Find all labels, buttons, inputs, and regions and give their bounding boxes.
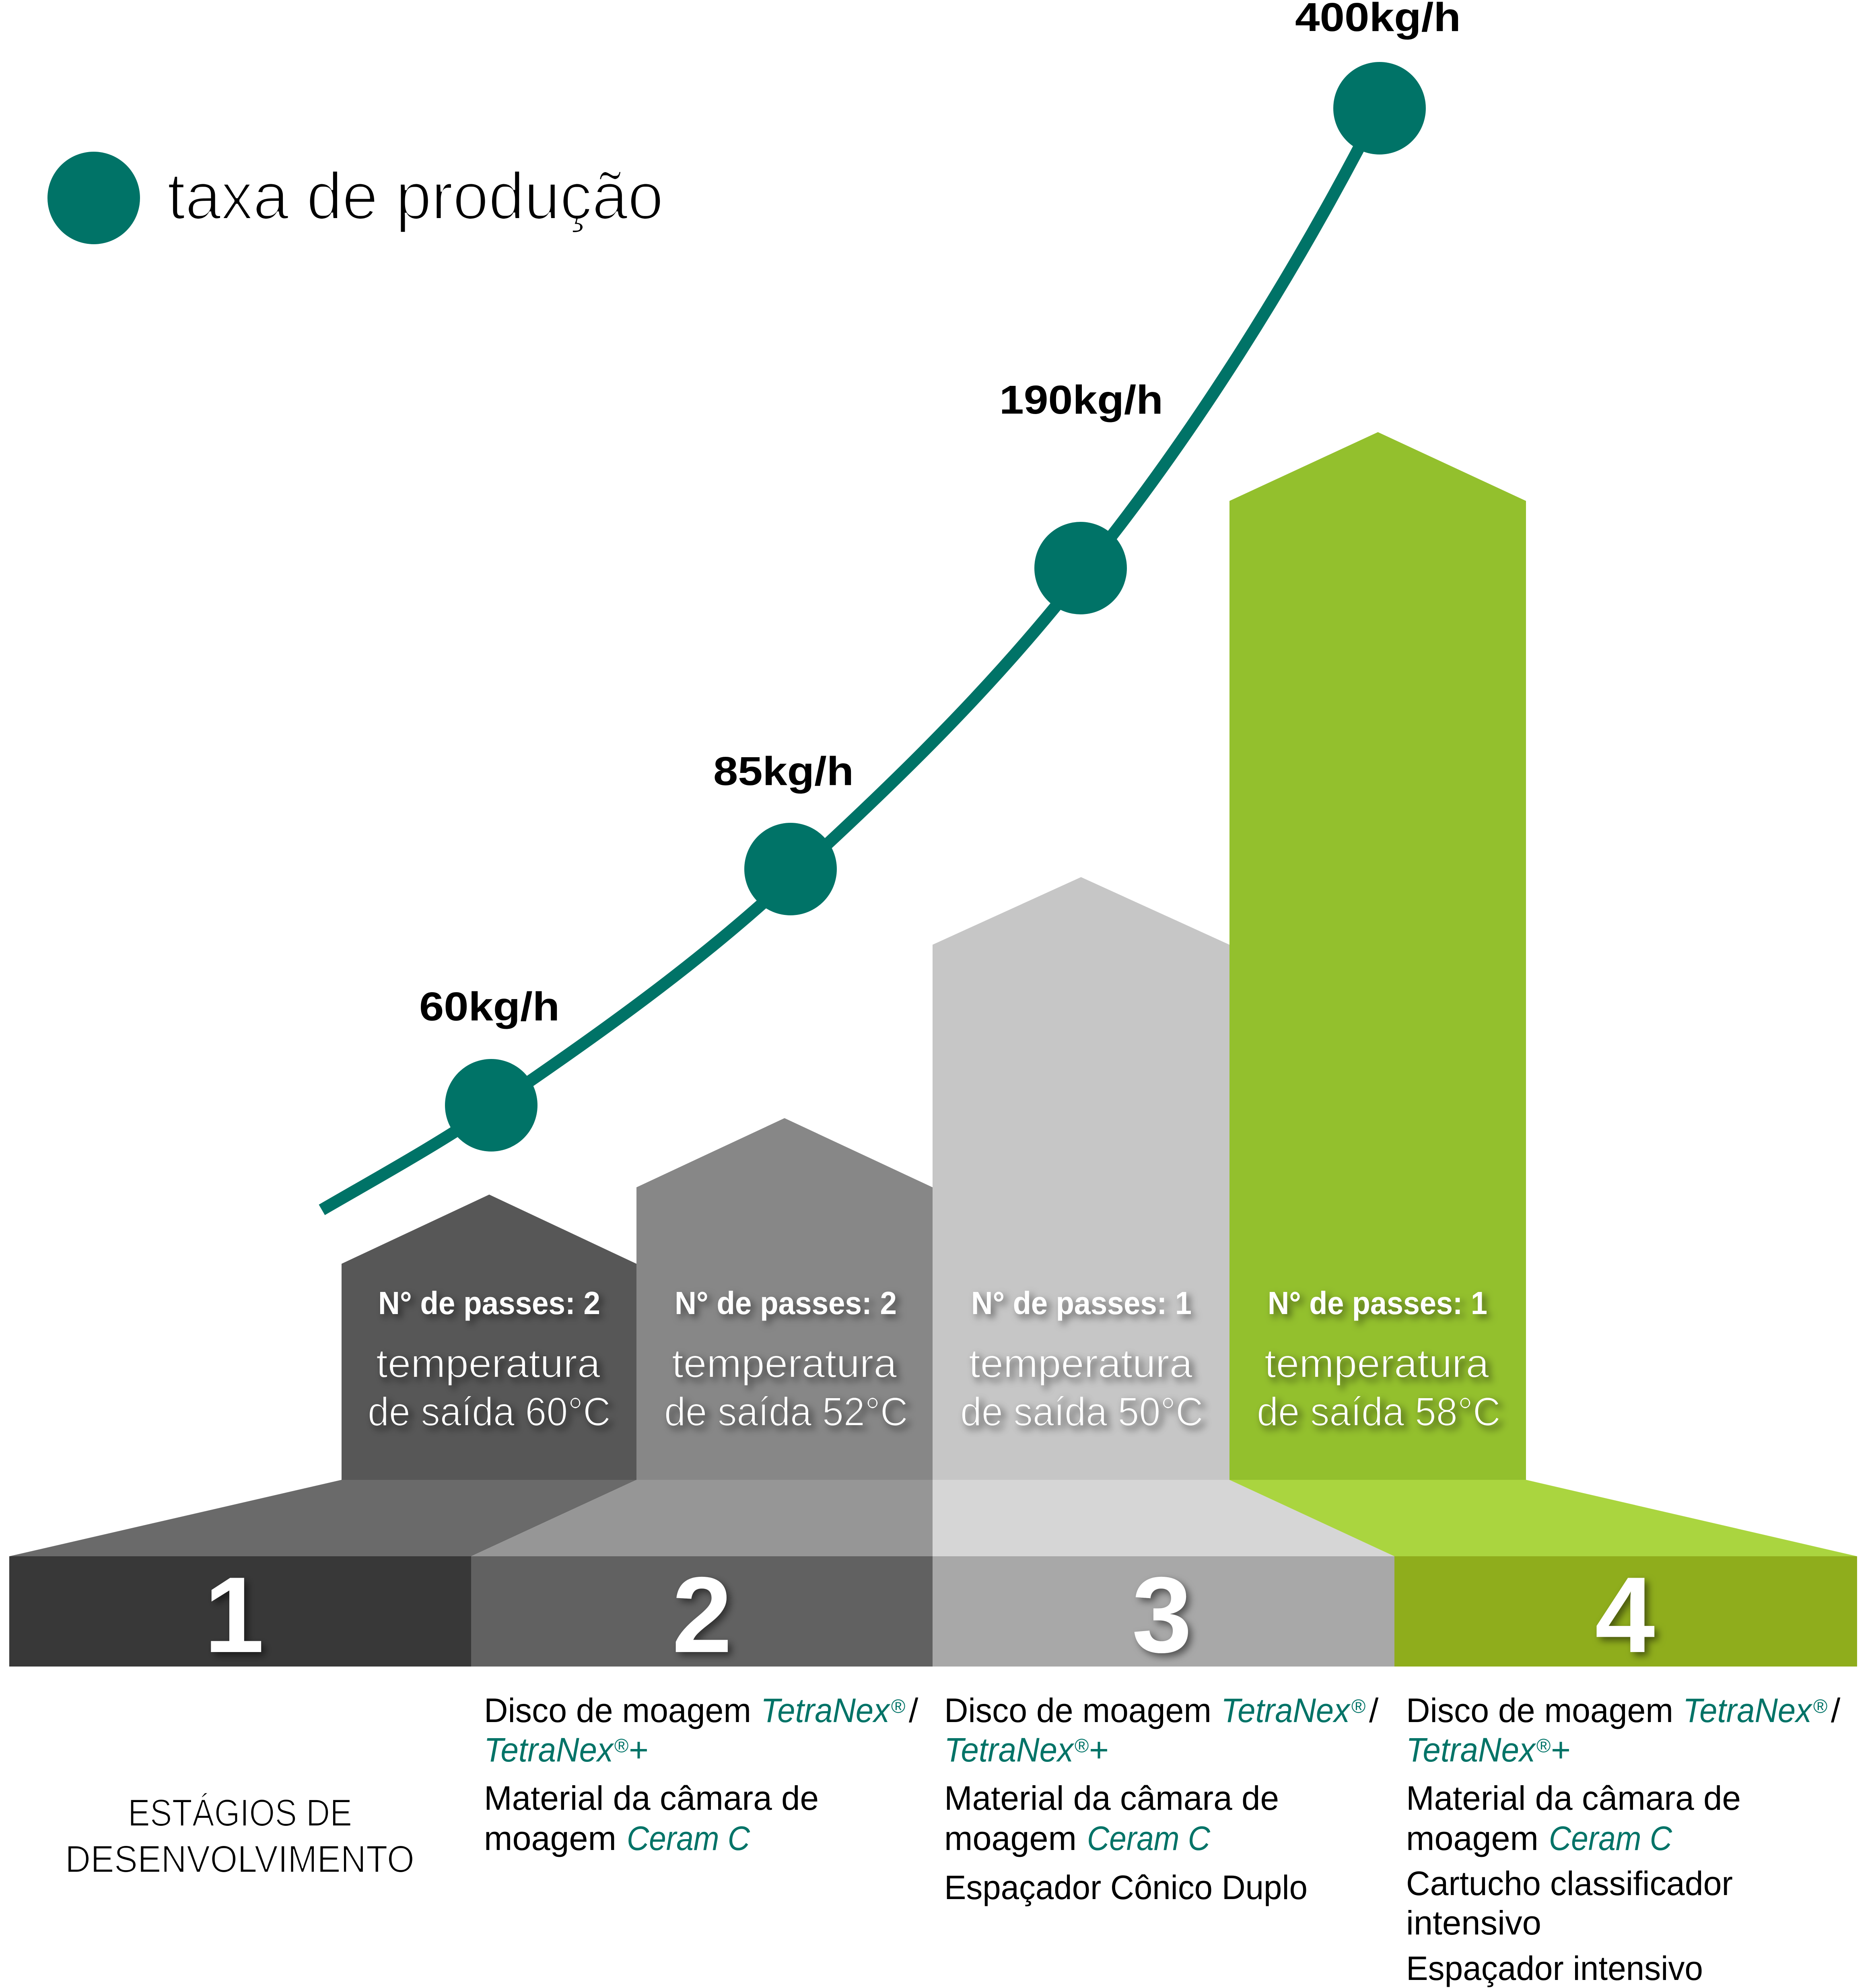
bar 2 text: N° de passes: 2 (675, 1285, 897, 1321)
data point 85kg/h (713, 749, 854, 915)
data point 60kg/h: 60kg/h (419, 984, 560, 1029)
production curve (322, 108, 1380, 1210)
bar 1 text (368, 1285, 611, 1434)
stage 2 specs: Material da câmara de (484, 1779, 819, 1817)
data point 85kg/h: 85kg/h (713, 749, 854, 794)
stage 3 specs: Disco de moagem (944, 1691, 1211, 1729)
bar 3 (933, 877, 1229, 1480)
stage 4 specs: intensivo (1406, 1904, 1541, 1942)
stage 3 specs (944, 1691, 1379, 1906)
stage 2 specs (484, 1691, 918, 1857)
stage numbers: 4 (1595, 1554, 1656, 1675)
stage 4 specs: Ceram C (1549, 1819, 1672, 1857)
bar 4 text: temperatura (1264, 1341, 1489, 1386)
stage block 1 (9, 1556, 471, 1667)
stage 4 specs: Cartucho classificador (1406, 1864, 1733, 1902)
bar 2 (636, 1118, 933, 1480)
stage 3 specs: ® (1075, 1735, 1089, 1757)
bar 4 text (1257, 1285, 1501, 1434)
legend dot (47, 152, 140, 244)
stages heading (65, 1792, 414, 1881)
stage 4 specs: Espaçador intensivo (1406, 1949, 1703, 1987)
stage 4 specs: + (1551, 1731, 1571, 1769)
stage 2 specs: / (909, 1691, 918, 1729)
stage 4 specs: / (1831, 1691, 1841, 1729)
stage 4 specs: TetraNex (1683, 1691, 1813, 1729)
stage 3 specs: TetraNex (1221, 1691, 1351, 1729)
stage numbers (204, 1554, 1656, 1675)
stage 3 specs: Ceram C (1087, 1819, 1211, 1857)
bar 4 (1229, 432, 1526, 1480)
stage 2 specs: TetraNex (484, 1731, 614, 1769)
stage 2 specs: ® (614, 1735, 628, 1757)
bar 4 text: N° de passes: 1 (1268, 1285, 1487, 1321)
stage 4 specs: moagem (1406, 1819, 1538, 1857)
stage 3 specs: moagem (944, 1819, 1077, 1857)
bar 2 text: temperatura (672, 1341, 897, 1386)
bar 3 text: de saída 50°C (960, 1389, 1203, 1434)
bar 2 text: de saída 52°C (664, 1389, 908, 1434)
base top 3 (933, 1480, 1394, 1556)
bar 1 text: temperatura (376, 1341, 600, 1386)
base top 2 (471, 1480, 933, 1556)
base top 1 (9, 1480, 636, 1556)
bar 1 text: de saída 60°C (368, 1389, 611, 1434)
stage 4 specs: ® (1536, 1735, 1551, 1757)
data point 190kg/h: 190kg/h (999, 377, 1163, 422)
legend: taxa de produção (47, 152, 663, 244)
stage block 2 (471, 1556, 933, 1667)
stage 2 specs: TetraNex (761, 1691, 891, 1729)
stage 2 specs: moagem (484, 1819, 616, 1857)
stage 4 specs: TetraNex (1406, 1731, 1536, 1769)
stage 2 specs: Ceram C (627, 1819, 750, 1857)
stage 2 specs: Disco de moagem (484, 1691, 751, 1729)
stage 4 specs (1406, 1691, 1841, 1987)
stage 3 specs: + (1089, 1731, 1109, 1769)
stage numbers: 3 (1132, 1554, 1192, 1675)
stage numbers: 2 (672, 1554, 732, 1675)
stage 4 specs: Material da câmara de (1406, 1779, 1741, 1817)
stage block 3 (933, 1556, 1394, 1667)
stage 2 specs: ® (891, 1696, 905, 1717)
stage 3 specs: Espaçador Cônico Duplo (944, 1869, 1308, 1906)
bar 2 text (664, 1285, 908, 1434)
data point 190kg/h (999, 377, 1163, 614)
stage 3 specs: Material da câmara de (944, 1779, 1279, 1817)
stage numbers: 1 (204, 1554, 264, 1675)
legend text: taxa de produção (167, 159, 663, 233)
stage 3 specs: / (1369, 1691, 1379, 1729)
bar 3 text: temperatura (969, 1341, 1192, 1386)
stage block 4 (1394, 1556, 1857, 1667)
stages heading: ESTÁGIOS DE (128, 1792, 352, 1834)
stage 4 specs: Disco de moagem (1406, 1691, 1673, 1729)
bar 4 text: de saída 58°C (1257, 1389, 1501, 1434)
bar 1 text: N° de passes: 2 (378, 1285, 600, 1321)
stage 2 specs: + (629, 1731, 649, 1769)
stage 3 specs: ® (1351, 1696, 1365, 1717)
stages heading: DESENVOLVIMENTO (65, 1838, 414, 1881)
bar 1 (342, 1195, 636, 1480)
stage 4 specs: ® (1813, 1696, 1827, 1717)
bar 3 text (960, 1285, 1203, 1434)
stage 3 specs: TetraNex (944, 1731, 1075, 1769)
data point 400kg/h (1295, 0, 1461, 155)
bar 3 text: N° de passes: 1 (971, 1285, 1192, 1321)
base top 4 (1229, 1480, 1857, 1556)
data point 60kg/h (419, 984, 560, 1152)
